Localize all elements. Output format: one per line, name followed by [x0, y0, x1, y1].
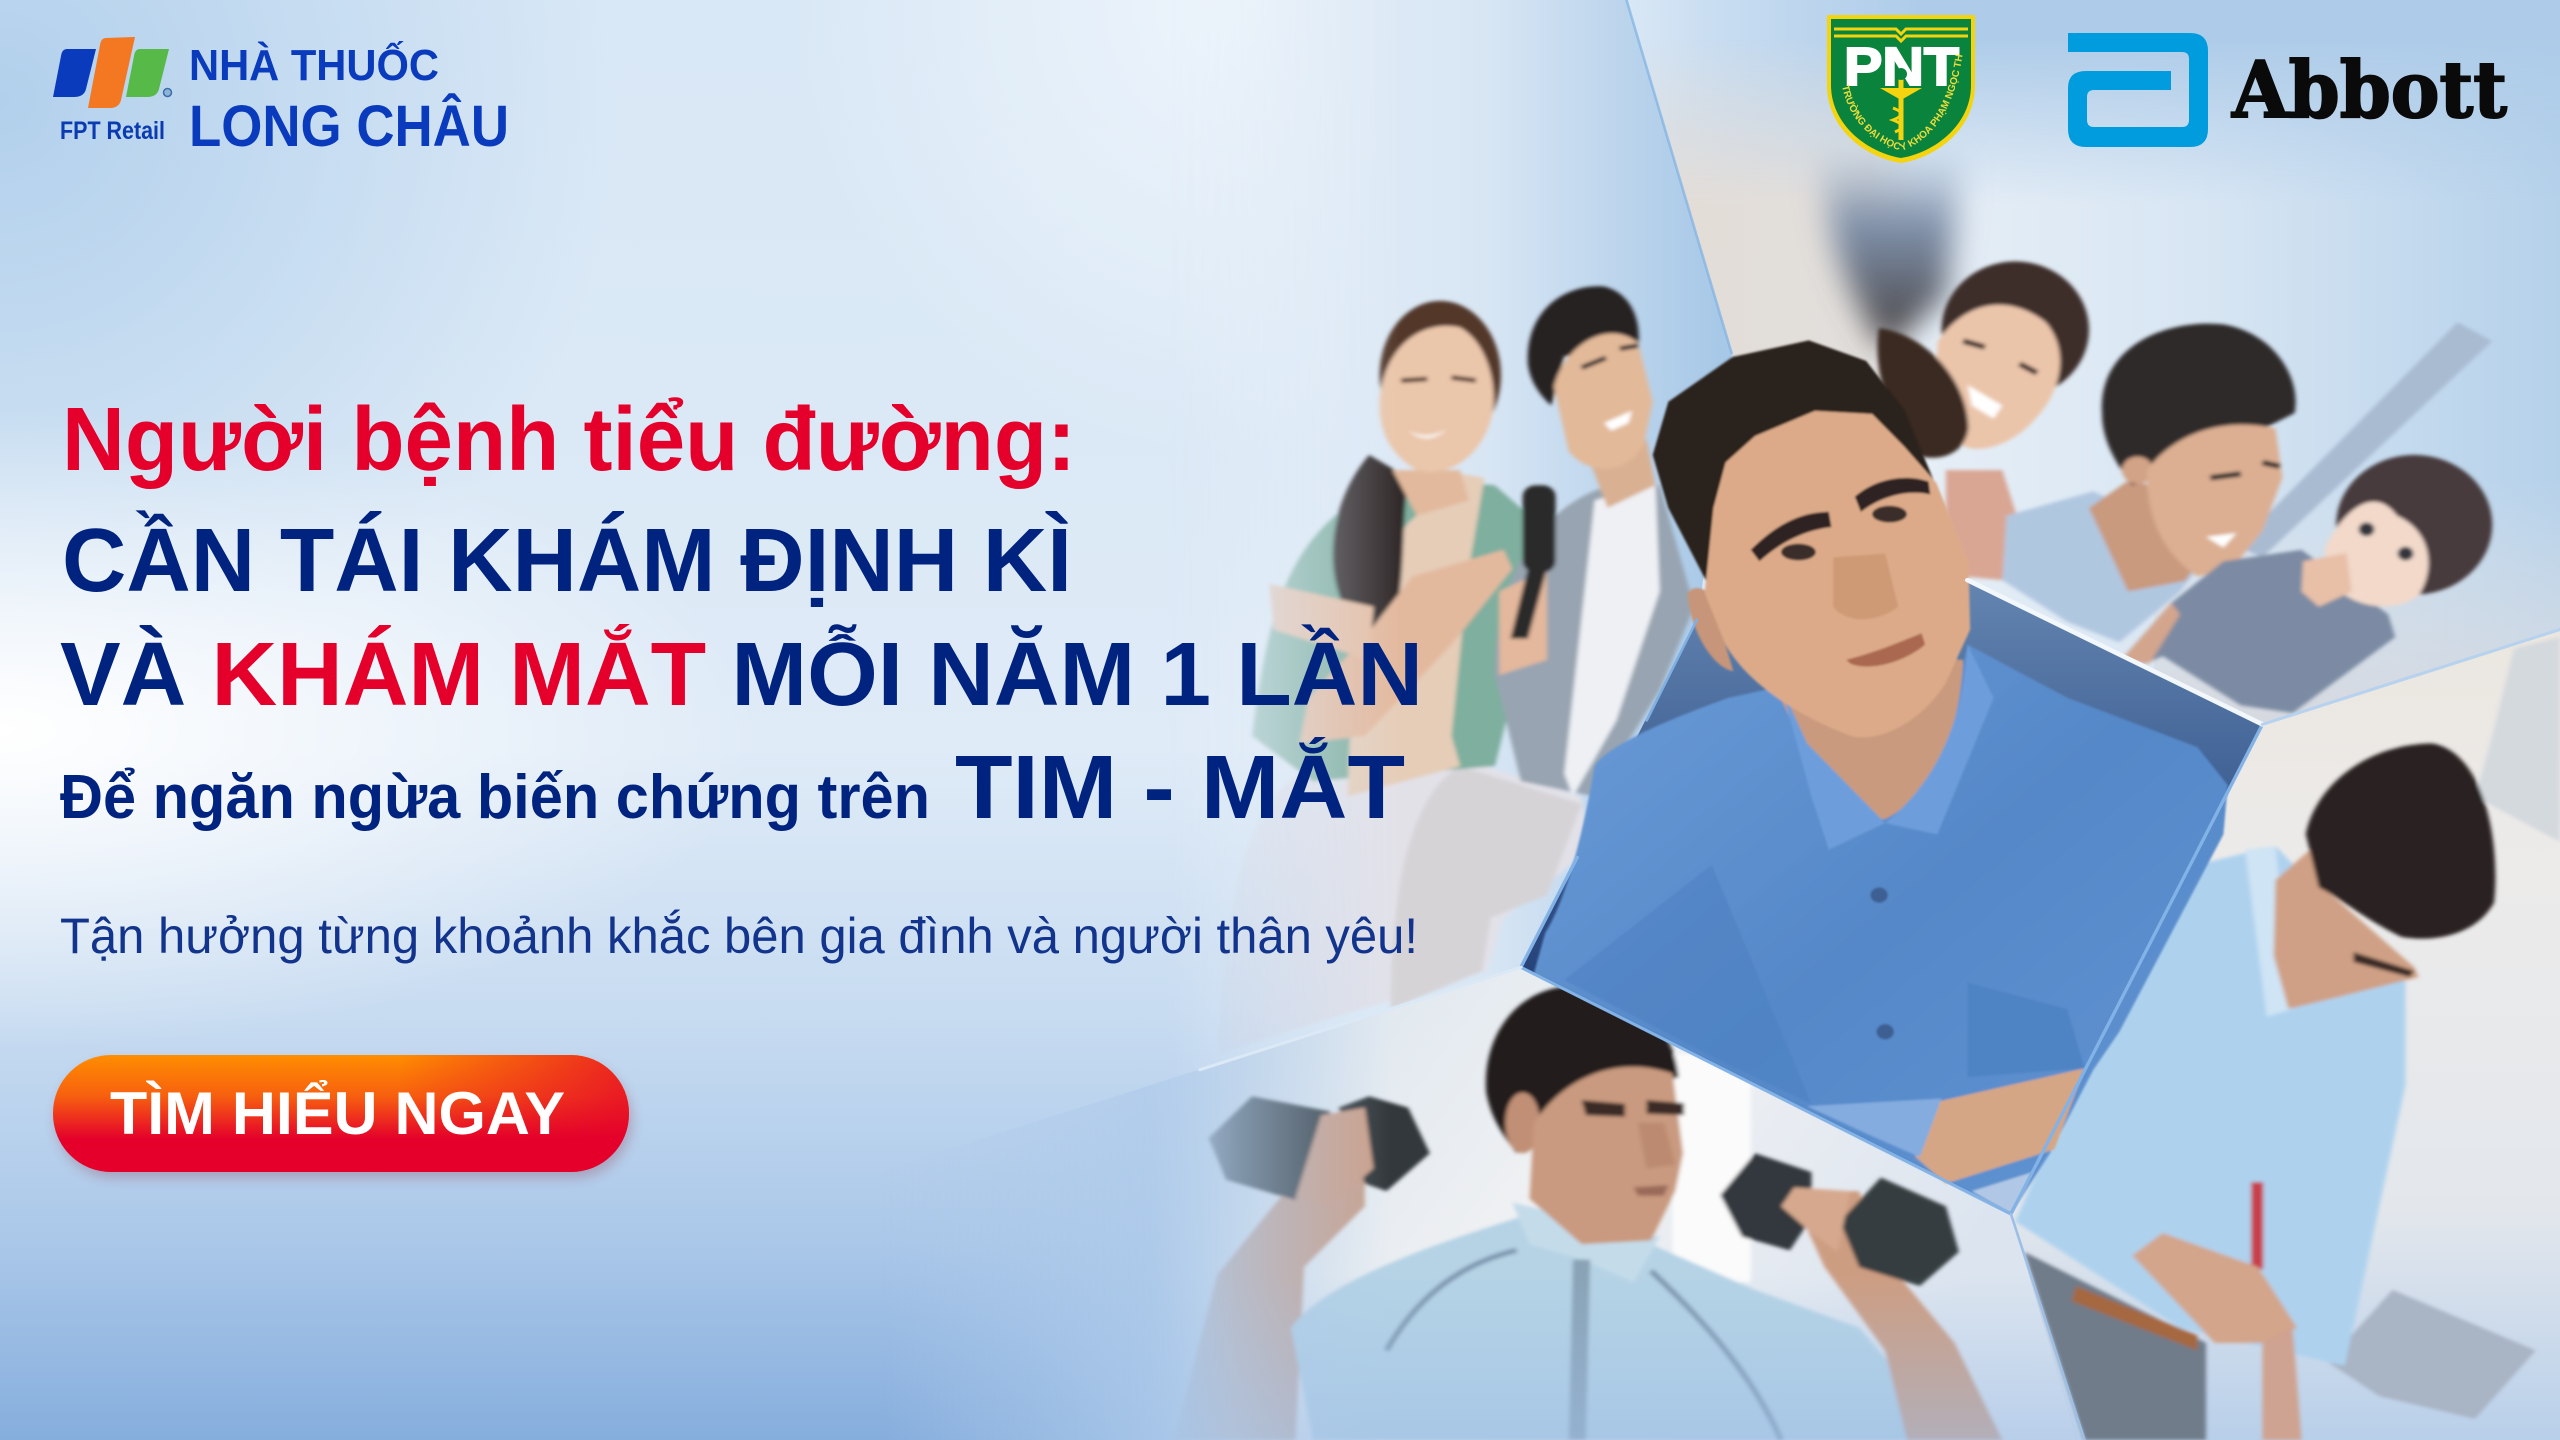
- logo: PNT university shield: [1827, 15, 1975, 163]
- photo panel: couple singing: [1221, 0, 1732, 1061]
- photo panel: man preparing food: [1981, 614, 2560, 1440]
- logo: Abbott wordmark: Abbott: [2231, 45, 2507, 136]
- heading: line 3: VÀ KHÁM MẮT MỖI NĂM 1 LẦN: [60, 623, 1423, 725]
- heading: line 2: CẦN TÁI KHÁM ĐỊNH KÌ: [62, 509, 1072, 611]
- panel edge lines: [1200, 0, 2560, 1440]
- logo: PNT university shield: PNT: [1844, 37, 1959, 97]
- photo panel: man lifting dumbbells: [955, 969, 2078, 1440]
- text: FPT Retail: FPT Retail: [60, 117, 165, 145]
- heading: line 4: Để ngăn ngừa biến chứng trên: [60, 763, 930, 832]
- button: learn more: TÌM HIỂU NGAY: [110, 1080, 565, 1147]
- icon: FPT blades: [53, 37, 172, 108]
- photo collage: [853, 0, 2560, 1440]
- photo panel: family with child: [1652, 64, 2560, 722]
- text: Nhà thuốc: NHÀ THUỐC: [189, 39, 439, 90]
- tagline: Tận hưởng từng khoảnh khắc bên gia đình và người thân yêu!: [60, 908, 1418, 964]
- heading: TIM - MẮT: TIM - MẮT: [955, 736, 1405, 838]
- heading block: [60, 390, 1423, 838]
- logo: Abbott mark: [2068, 33, 2208, 147]
- button: learn more: [53, 1055, 632, 1178]
- text: Long Châu: LONG CHÂU: [189, 94, 509, 159]
- photo panel: central man looking up: [1521, 340, 2262, 1214]
- heading: line 1: Người bệnh tiểu đường:: [62, 390, 1076, 490]
- logo: FPT Retail / Long Châu: [53, 37, 509, 159]
